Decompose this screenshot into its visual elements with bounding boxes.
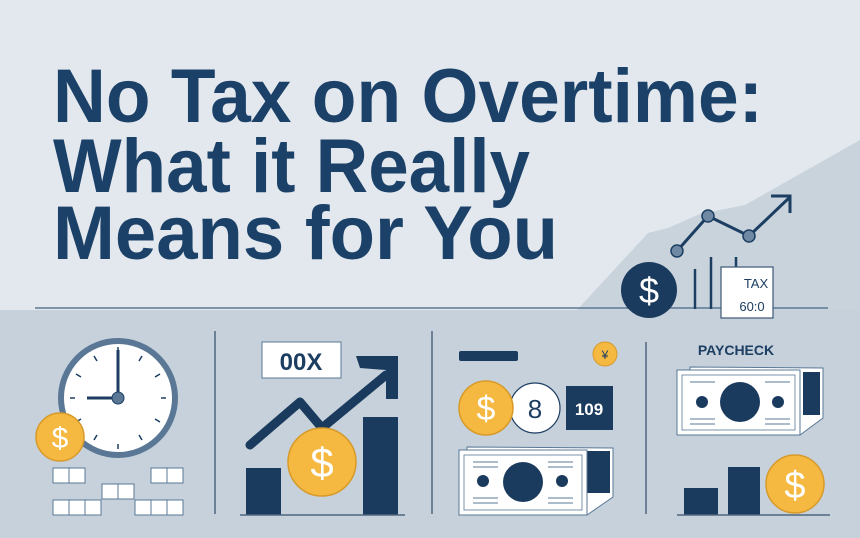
panel: clock: [36, 341, 183, 515]
panel: growth chart: $: [310, 439, 334, 486]
panel: coins and bill: 109: [575, 400, 603, 419]
header illustration: dollar, chart, tax box: [621, 196, 790, 318]
panel: coins and bill: 8: [528, 394, 542, 424]
title: No Tax on Overtime:: [53, 54, 763, 139]
title: Means for You: [53, 191, 558, 276]
icon: banknote: [459, 447, 613, 515]
panel: growth chart: [240, 342, 405, 515]
panel: coins and bill: $: [477, 390, 496, 428]
title: [53, 54, 763, 276]
header illustration: dollar, chart, tax box: 60:0: [739, 299, 765, 314]
panel: paycheck: PAYCHECK: [698, 342, 774, 358]
panel: clock: $: [52, 422, 69, 455]
panel: coins and bill: ¥: [601, 348, 609, 362]
icon: paycheck banknote: [677, 367, 823, 435]
panel: paycheck: [677, 342, 830, 515]
header illustration: dollar, chart, tax box: $: [639, 270, 659, 311]
dividers: [214, 331, 216, 514]
lower band background: [0, 310, 860, 538]
panel: coins and bill: [459, 342, 617, 515]
panel: growth chart: 00X: [280, 349, 322, 376]
panel: paycheck: $: [784, 465, 806, 507]
background mountain shape: [577, 140, 860, 310]
header illustration: dollar, chart, tax box: TAX: [744, 276, 768, 291]
title: What it Really: [53, 124, 530, 209]
